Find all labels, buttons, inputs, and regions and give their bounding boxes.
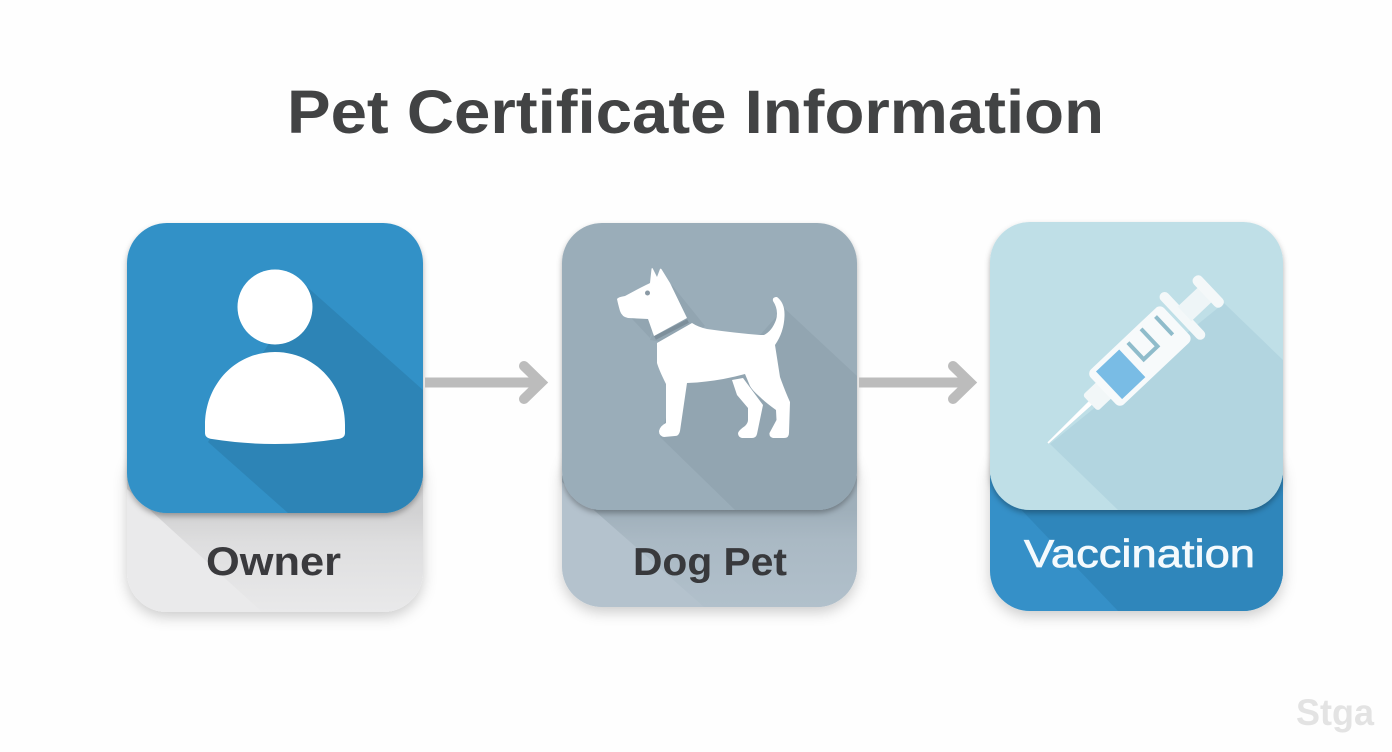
dog label plate [562,440,857,607]
owner label plate [127,440,423,612]
icon: syringe [1027,265,1234,466]
vaccination icon tile [990,222,1283,510]
dog head [617,268,687,336]
vaccination label: Vaccination [1024,533,1255,576]
infographic [120,88,1374,732]
dog icon tile [562,223,857,510]
dog collar [655,321,688,338]
icon: dog [617,268,790,438]
vaccination label plate [990,440,1283,611]
panel: dog pet [562,223,857,607]
watermark: Stga [1296,692,1374,733]
dog far hind leg [732,378,763,438]
owner label: Owner [206,540,341,584]
panel: owner [127,223,423,612]
arrow: dog to vaccination [859,366,970,399]
icon: person [205,270,345,444]
title: Pet Certificate Information [287,78,1104,146]
dog body [657,297,790,438]
owner icon tile [127,223,423,513]
dog label: Dog Pet [633,541,787,584]
arrow: owner to dog [425,366,541,399]
panel: vaccination [990,222,1283,611]
